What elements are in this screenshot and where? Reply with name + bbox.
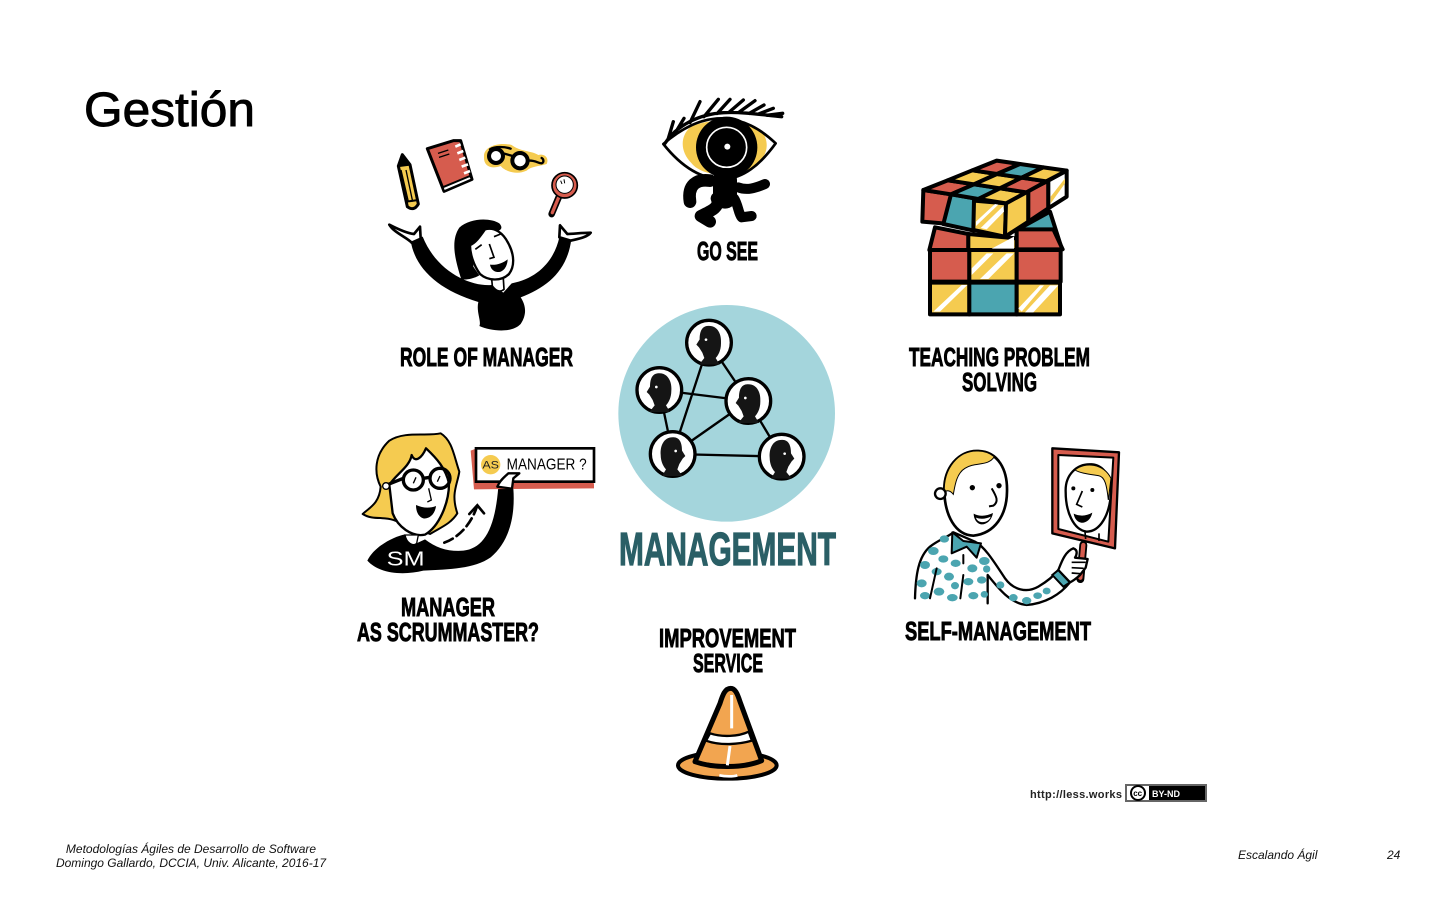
label: manager as scrummaster: AS SCRUMMASTER? [357, 617, 539, 647]
footer: course credit: Domingo Gallardo, DCCIA, Univ. Alicante, 2016-17 [56, 856, 327, 870]
illustration: management network [618, 305, 835, 522]
icon: pencil [398, 155, 418, 209]
eyelashes [665, 99, 783, 143]
figure: juggling manager [389, 220, 591, 330]
manager sign: MANAGER ? [507, 456, 587, 473]
illustration: manager as scrummaster [363, 433, 594, 573]
icon: book [427, 141, 472, 191]
title: Gestión [84, 84, 255, 137]
badge: creative commons BY-ND: BY-ND [1152, 789, 1180, 799]
footer: course credit: Metodologías Ágiles de Desarrollo de Software [66, 841, 316, 856]
person node 3 [726, 379, 771, 423]
face [389, 448, 449, 535]
illustration: go see [663, 99, 783, 222]
person node 5 [759, 434, 804, 479]
illustration: role of manager [389, 141, 591, 330]
label: self-management: SELF-MANAGEMENT [905, 616, 1091, 646]
dashed arrow [444, 505, 484, 543]
person node 1 [687, 320, 731, 365]
footer: section name: Escalando Ágil [1238, 847, 1318, 862]
illustration: rubik's cube [922, 161, 1067, 314]
label: role of manager: ROLE OF MANAGER [400, 342, 573, 372]
label: improvement service: IMPROVEMENT [659, 623, 796, 653]
heading: management: MANAGEMENT [619, 523, 836, 575]
person node 4 [650, 432, 695, 476]
label: improvement service: SERVICE [693, 648, 763, 678]
hand holding mirror [1058, 548, 1088, 582]
SM letters: SM [387, 548, 425, 570]
badge: creative commons BY-ND: cc [1133, 789, 1143, 798]
mirror handle [1080, 545, 1083, 579]
credit: less.works url: http://less.works [1030, 789, 1122, 801]
footer: page number: 24 [1386, 848, 1401, 862]
footer: course credit [56, 841, 327, 870]
walking body [690, 180, 765, 222]
label: improvement service [659, 623, 796, 678]
label: go see: GO SEE [697, 236, 758, 266]
badge: creative commons BY-ND [1126, 785, 1206, 801]
label: manager as scrummaster: MANAGER [401, 592, 495, 622]
collar [952, 532, 981, 558]
upper cube layer [922, 161, 1067, 237]
hand [497, 473, 519, 489]
glasses [387, 468, 450, 490]
icon: traffic cone [678, 688, 777, 779]
shirt [915, 532, 1070, 605]
mirror [1052, 448, 1119, 548]
connecting lines [659, 343, 782, 457]
head [935, 451, 1007, 536]
label: manager as scrummaster [357, 592, 539, 647]
icon: glasses [484, 144, 547, 173]
stripes on upper faces [976, 204, 1004, 229]
label: teaching problem solving: SOLVING [962, 367, 1037, 397]
illustration: self-management [915, 448, 1119, 605]
collar [405, 535, 418, 545]
label: teaching problem solving: TEACHING PROBLEM [909, 342, 1090, 372]
shirt creases and cuff [930, 555, 1070, 598]
facial features [383, 476, 440, 518]
teal circle [618, 305, 835, 522]
lower cube layers [929, 212, 1063, 314]
stripes on lower faces [933, 237, 1058, 312]
manager sign [471, 448, 594, 489]
shirt dots [917, 535, 1051, 604]
manager sign: AS [482, 460, 499, 472]
person node 2 [637, 368, 682, 412]
hair [363, 433, 459, 534]
torso and raised arm [367, 487, 514, 573]
label: teaching problem solving [909, 342, 1090, 397]
icon: magnifier [552, 173, 577, 214]
eye [663, 117, 776, 179]
